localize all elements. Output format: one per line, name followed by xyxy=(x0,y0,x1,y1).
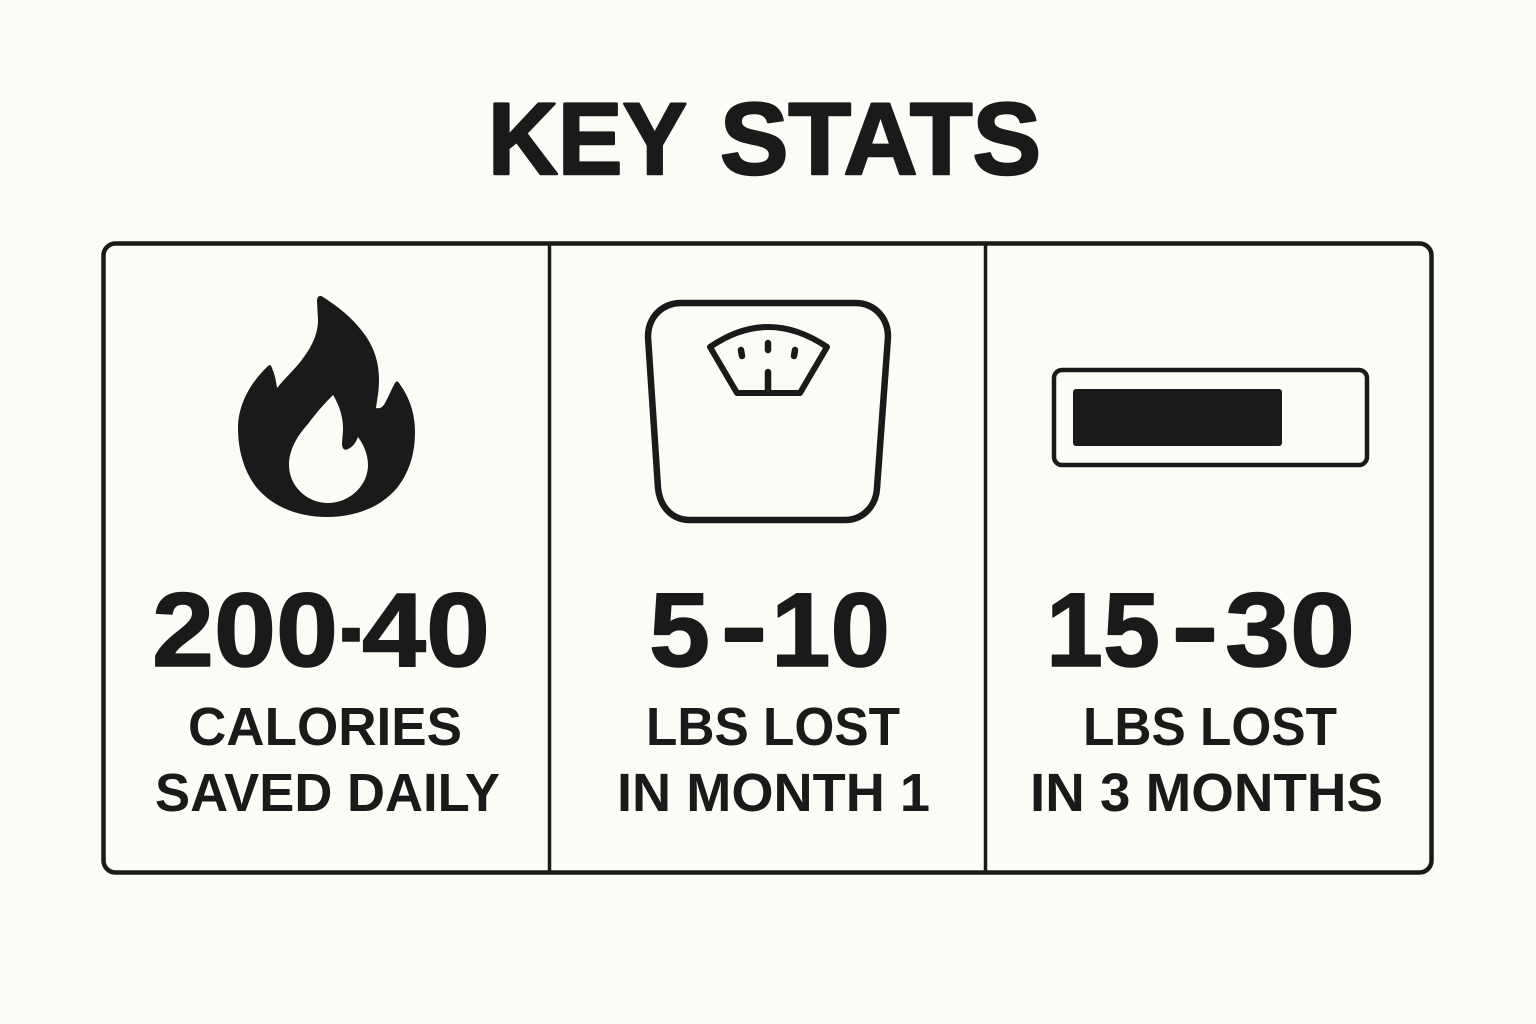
stat: 200-40 xyxy=(152,568,490,689)
label: calories saved daily xyxy=(155,697,500,823)
icon: progress bar xyxy=(1054,370,1367,465)
label: lbs lost in month 1 xyxy=(617,697,930,823)
stat: 5–10 xyxy=(649,569,890,689)
label: lbs lost in month 1: IN MONTH 1 xyxy=(617,763,930,823)
label: lbs lost in month 1: LBS LOST xyxy=(646,697,900,757)
stat: 5–10: 10 xyxy=(771,572,890,689)
stat: 15–30 xyxy=(1046,569,1355,689)
panel outline xyxy=(104,244,1432,872)
stat: 5–10: – xyxy=(724,569,764,686)
label: calories saved daily: CALORIES xyxy=(188,697,462,757)
stat: 5–10: 5 xyxy=(649,572,710,689)
stat: 200-40: 40 xyxy=(362,572,490,689)
title: STATS xyxy=(720,82,1041,196)
stat: 15–30: – xyxy=(1175,569,1215,686)
panel: calories xyxy=(152,296,500,823)
title: KEY xyxy=(488,82,687,196)
stat: 200-40: 200 xyxy=(152,572,338,689)
label: calories saved daily: SAVED DAILY xyxy=(155,763,500,823)
stat: 15–30: 30 xyxy=(1225,572,1355,689)
panel: month 1 xyxy=(617,303,930,823)
icon: flame xyxy=(238,296,415,517)
label: lbs lost in 3 months: LBS LOST xyxy=(1083,697,1337,757)
stat: 15–30: 15 xyxy=(1046,572,1160,689)
stats panel xyxy=(104,244,1432,872)
label: lbs lost in 3 months: IN 3 MONTHS xyxy=(1030,763,1383,823)
label: lbs lost in 3 months xyxy=(1030,697,1383,823)
panel: 3 months xyxy=(1030,370,1383,823)
title xyxy=(488,82,1041,196)
stat: 200-40: - xyxy=(340,568,362,685)
icon: bathroom scale xyxy=(648,303,888,520)
